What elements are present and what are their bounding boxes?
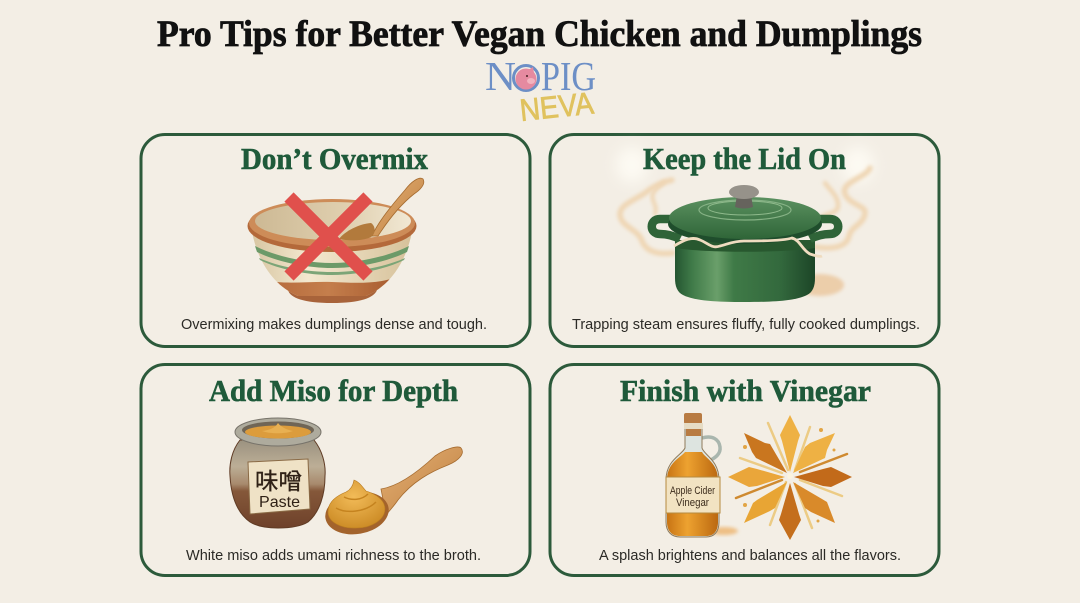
icon: flavor starburst: [728, 415, 852, 540]
icon: wooden spoon: [339, 178, 424, 240]
panel: keep the lid on: [550, 134, 939, 346]
caption: keep the lid on: Trapping steam ensures fluffy, fully cooked dumplings.: [572, 317, 920, 333]
icon: steam clouds: [616, 147, 874, 254]
icon: red cross: [289, 197, 368, 276]
bottle label: Vinegar: [676, 497, 709, 509]
caption: don't overmix: Overmixing makes dumplings dense and tough.: [181, 317, 487, 333]
bottle label: [666, 477, 720, 513]
heading: don't overmix: Don’t Overmix: [241, 141, 428, 176]
panel: don't overmix: [141, 134, 530, 346]
panel: add miso for depth: [141, 364, 530, 576]
pot handles: [652, 219, 838, 239]
logo: No Pig Neva: N: [485, 53, 516, 99]
icon: jar label: Paste: [259, 494, 300, 511]
logo: No Pig Neva: PIG: [541, 53, 596, 99]
title: Pro Tips for Better Vegan Chicken and Dumplings: [157, 14, 922, 55]
icon: green dutch oven: [652, 185, 844, 302]
icon: spoon with miso: [322, 447, 462, 539]
icon: apple cider vinegar bottle: [666, 413, 738, 537]
caption: add miso: White miso adds umami richness to the broth.: [186, 548, 481, 564]
icon: mixing bowl crossed out: [248, 178, 424, 303]
panel: finish with vinegar: [550, 364, 939, 576]
icon: escaping steam: [674, 238, 822, 256]
icon: jar label: 味噌: [255, 468, 302, 494]
heading: finish with vinegar: Finish with Vinegar: [620, 373, 871, 408]
heading: keep the lid on: Keep the Lid On: [643, 141, 846, 176]
icon: jar label: [248, 459, 310, 514]
logo: No Pig Neva: NEVA: [518, 85, 596, 128]
icon: miso jar: [230, 418, 325, 528]
bottle label: Apple Cider: [670, 485, 715, 497]
icon: pig face: [516, 67, 536, 90]
logo: No Pig Neva: [485, 53, 596, 128]
heading: add miso for depth: Add Miso for Depth: [209, 373, 458, 408]
icon: lid knob: [729, 185, 759, 208]
caption: finish with vinegar: A splash brightens and balances all the flavors.: [599, 548, 901, 564]
